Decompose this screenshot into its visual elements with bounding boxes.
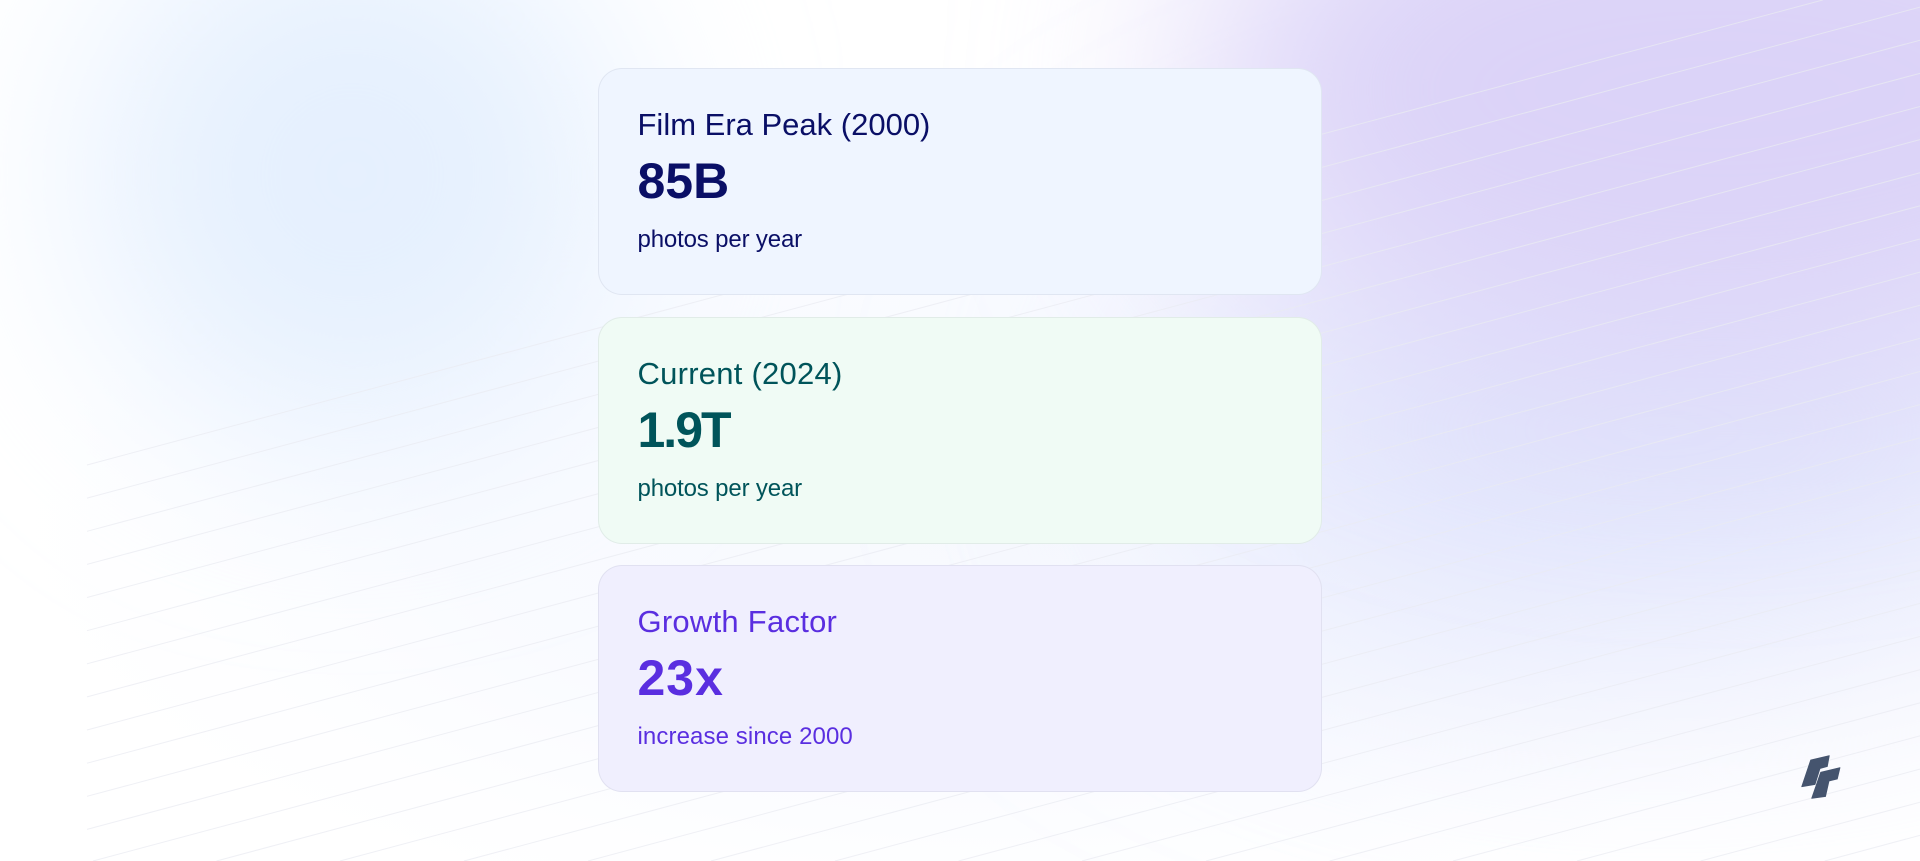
heading: current: Current (2024) [638, 356, 843, 391]
panel: film era peak [598, 68, 1322, 295]
icon: logo [1801, 755, 1840, 799]
value: 1.9T: 1.9T [638, 402, 730, 458]
caption: photos per year: photos per year [638, 226, 802, 253]
value: 23x: 23x [638, 650, 724, 706]
caption: photos per year: photos per year [638, 475, 802, 502]
caption: increase since 2000: increase since 2000 [638, 723, 853, 750]
heading: growth factor: Growth Factor [638, 604, 837, 639]
panel: current 2024 [598, 317, 1322, 544]
panel: growth factor [598, 565, 1322, 792]
value: 85B: 85B [638, 153, 729, 209]
heading: film era peak: Film Era Peak (2000) [638, 107, 930, 142]
